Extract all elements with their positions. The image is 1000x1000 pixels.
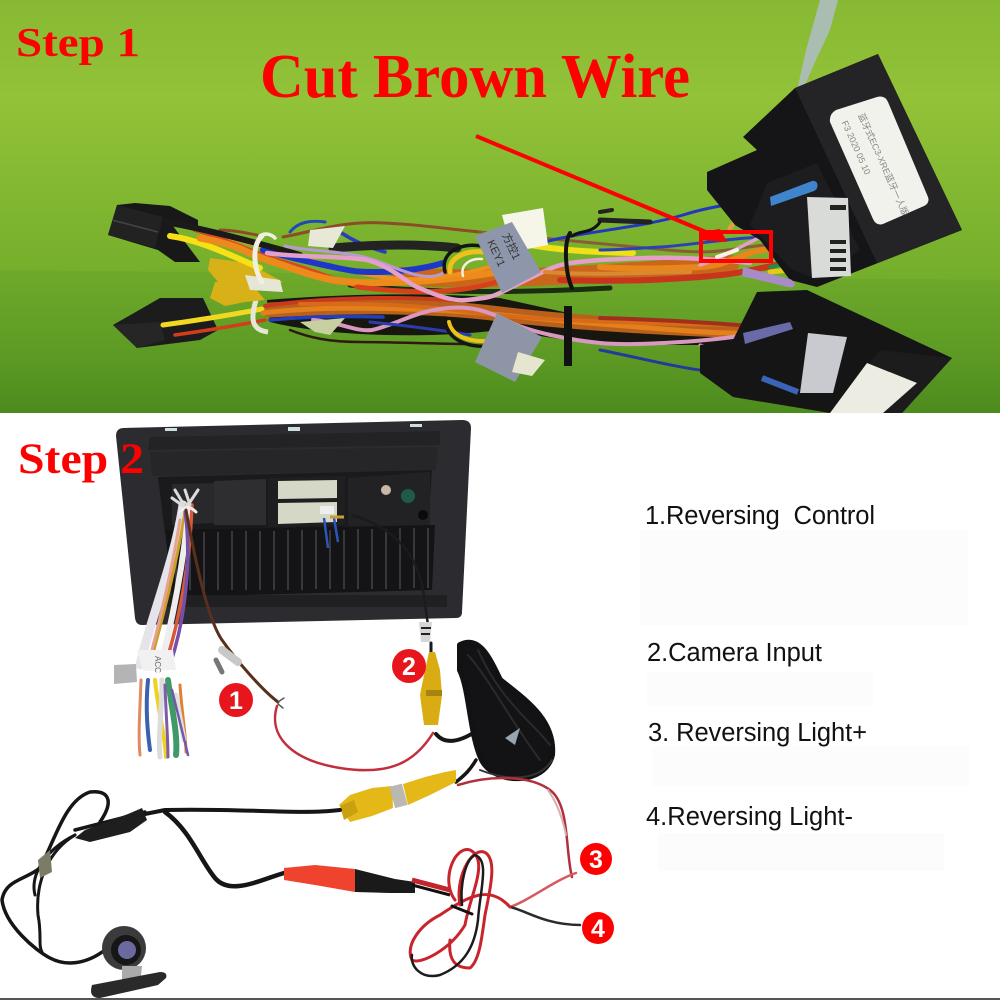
wire bundle xyxy=(165,200,810,300)
inline module xyxy=(38,808,147,878)
yellow object behind connector xyxy=(208,258,283,290)
red and black RCA plug xyxy=(284,865,450,895)
harness label tag: ACC xyxy=(153,656,162,673)
cable labels xyxy=(308,208,548,293)
badge 4: 4 xyxy=(591,915,605,943)
red and black wire bundle xyxy=(410,850,510,976)
cable labels: 方控1 xyxy=(499,230,524,262)
title: step 2: Step 2 xyxy=(18,436,144,483)
badge 4 xyxy=(582,912,614,944)
callout: red arrow and highlight box xyxy=(476,136,771,261)
badge 2: 2 xyxy=(402,653,416,681)
brown and red reversing control wire xyxy=(186,510,433,770)
cable labels: KEY1 xyxy=(484,238,507,269)
reflection of module xyxy=(700,290,952,413)
harness label tag xyxy=(114,650,176,684)
badge 1: 1 xyxy=(229,687,243,715)
title: step 1: Step 1 xyxy=(16,19,140,65)
badge 1 xyxy=(219,683,253,717)
right black module: F3 2020 05 10 xyxy=(840,119,872,176)
flat ribbon cable xyxy=(798,0,838,92)
label: camera input: 2.Camera Input xyxy=(647,639,822,667)
camera black cables and inline module xyxy=(2,792,340,963)
red wire to badge 3 xyxy=(458,778,576,907)
title: cut brown wire: Cut Brown Wire xyxy=(260,43,690,111)
black wire to badge 4 xyxy=(510,907,580,925)
faint patches behind labels xyxy=(640,530,969,871)
reflection of harness xyxy=(113,280,952,413)
label: reversing control: 1.Reversing Control xyxy=(645,502,875,530)
rear view camera xyxy=(91,926,166,998)
label: reversing light negative: 4.Reversing Light- xyxy=(646,803,853,831)
wiring harness of head unit xyxy=(139,490,198,757)
head unit back panel xyxy=(116,420,471,625)
panel: step 1 photo of wiring harness xyxy=(0,0,1000,413)
panel: step 2 white area xyxy=(0,413,1000,1000)
label: reversing light positive: 3. Reversing Light+ xyxy=(648,719,867,747)
camera input cable and yellow plug xyxy=(352,515,478,741)
badge 2 xyxy=(392,649,426,683)
left black connector xyxy=(108,203,200,262)
right black module xyxy=(707,54,962,287)
badge 3 xyxy=(580,843,612,875)
yellow RCA coupler xyxy=(339,770,456,822)
right black module: 蓝牙式EC3-XRE蓝牙一人版 xyxy=(856,111,911,217)
badge 3: 3 xyxy=(589,846,603,874)
coiled camera extension cable xyxy=(456,643,552,782)
